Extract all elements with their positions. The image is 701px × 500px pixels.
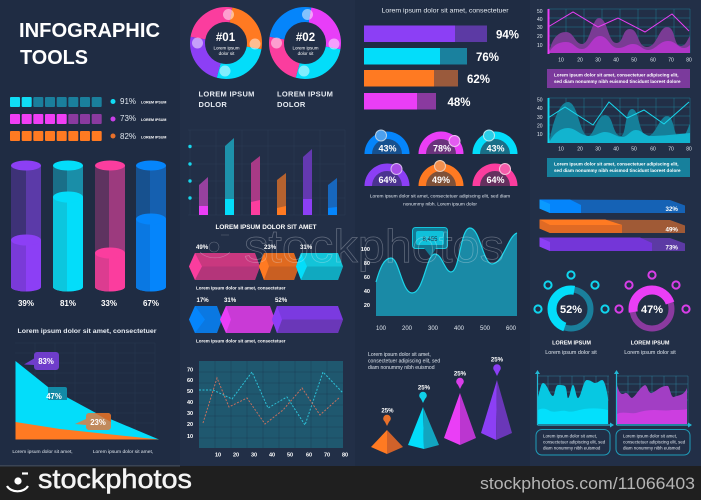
note box right: consectetuer adipiscing elit, sed [623, 440, 686, 444]
area chart with callouts: Lorem ipsum dolor sit amet, [12, 449, 73, 455]
ring #01: #01 [216, 32, 236, 44]
square progress rows [10, 97, 166, 141]
square progress rows: LOREM IPSUM [141, 118, 166, 122]
column chart [188, 130, 345, 215]
wave area chart: 20 [364, 303, 370, 309]
cyan note box [547, 158, 690, 177]
dashed line chart: 80 [342, 452, 348, 458]
cyan note box: sed diam nonummy nibh euismod tincidunt laoreet dolore [554, 168, 681, 173]
gauges: 64% [486, 175, 505, 185]
magenta line and area chart: 30 [595, 58, 601, 64]
cylinder 67%: 67% [143, 299, 159, 308]
value callout: 8,455 [422, 237, 438, 243]
ring #01: Lorem ipsum [213, 46, 240, 50]
title: INFOGRAPHIC [19, 20, 160, 42]
cyan line and area chart [537, 98, 692, 177]
ring #02: dolor sit [298, 51, 314, 56]
wave area chart: 100 [376, 326, 387, 332]
ring labels [198, 90, 333, 109]
ring #01 [192, 9, 260, 76]
area chart with callouts: Lorem ipsum dolor sit amet, [93, 449, 153, 455]
hexagon bar row 1: 23% [264, 244, 277, 251]
gauges [364, 130, 518, 186]
dashed line chart: 50 [187, 389, 193, 395]
horizontal bar chart: 76% [476, 52, 499, 64]
magenta line and area chart [537, 9, 692, 88]
dashed line chart: 50 [287, 452, 293, 458]
donut 47% [615, 271, 690, 356]
square progress rows: 73% [120, 114, 136, 123]
cyan line and area chart: 50 [537, 98, 543, 104]
wave area chart: 200 [402, 326, 413, 332]
pyramid chart: 25% [454, 370, 467, 378]
gauges: 64% [378, 175, 397, 185]
callout 23% [75, 413, 111, 430]
pyramid chart: Lorem ipsum dolor sit amet, [368, 352, 431, 358]
bottom watermark bar: stockphotos [38, 464, 192, 494]
pyramid chart: 25% [491, 356, 504, 364]
area chart with callouts [12, 328, 159, 455]
magenta line and area chart: 40 [537, 17, 543, 23]
ring #02 [271, 9, 340, 76]
small cyan area chart [535, 370, 614, 428]
magenta note box: sed diam nonummy nibh euismod tincidunt laoreet dolore [554, 79, 681, 84]
magenta note box [547, 69, 690, 88]
dashed line chart: 30 [251, 452, 257, 458]
magenta line and area chart: 10 [537, 43, 543, 49]
horizontal bar chart [364, 8, 519, 110]
watermark overlay: stockphotos [244, 220, 504, 272]
callout 83%: 83% [38, 357, 54, 366]
magenta line and area chart: 50 [631, 58, 637, 64]
wave area chart: 60 [364, 275, 370, 281]
callout 47% [46, 387, 67, 401]
square progress rows: LOREM IPSUM [141, 100, 166, 104]
gauges: 43% [486, 144, 505, 154]
hexagon bar row 2: Lorem ipsum dolor sit amet, consectetuer [196, 338, 286, 344]
gauge caption [370, 194, 510, 208]
hexagon bar row 2: 52% [275, 297, 288, 304]
gauges: 78% [433, 144, 451, 154]
cyan note box: Lorem ipsum dolor sit amet, consectetuer adipiscing elit, [554, 162, 679, 166]
dashed line chart [187, 361, 348, 458]
callout 47%: 47% [46, 392, 62, 401]
magenta line and area chart: 30 [537, 25, 543, 31]
area chart with callouts: Lorem ipsum dolor sit amet, consectetuer [18, 328, 157, 335]
horizontal bar chart: Lorem ipsum dolor sit amet, consectetuer [382, 8, 509, 14]
horizontal bar chart: 62% [467, 74, 490, 86]
value callout [412, 228, 448, 257]
wave area chart: 80 [364, 261, 370, 267]
cyan line and area chart: 80 [686, 146, 692, 152]
cyan line and area chart: 30 [537, 115, 543, 121]
donut 47%: 47% [641, 304, 663, 316]
cylinder 33%: 33% [101, 299, 117, 308]
wave area chart: 400 [454, 326, 465, 332]
dashed line chart: 70 [187, 368, 193, 374]
magenta line and area chart: 50 [537, 9, 543, 15]
donut 52%: LOREM IPSUM [552, 340, 591, 346]
note box right: Lorem ipsum dolor sit amet, [623, 434, 677, 438]
wave area chart: 40 [364, 289, 370, 295]
horizontal bar chart: 48% [448, 97, 471, 109]
dashed line chart: 70 [324, 452, 330, 458]
column chart heading: LOREM IPSUM DOLOR SIT AMET [216, 224, 317, 231]
dashed line chart: 10 [215, 452, 221, 458]
wave area chart: 300 [428, 326, 439, 332]
title: TOOLS [20, 47, 88, 69]
cyan line and area chart: 20 [577, 146, 583, 152]
wave area chart [361, 228, 517, 332]
hexagon bar row 1 [189, 244, 343, 290]
gauges: 43% [378, 144, 397, 154]
dashed line chart: 20 [233, 452, 239, 458]
pyramid chart [368, 352, 512, 454]
ring #01: dolor sit [219, 51, 235, 56]
hexagon bar row 2 [189, 297, 343, 344]
hexagon bar row 1: Lorem ipsum dolor sit amet, consectetuer [196, 286, 286, 290]
magenta line and area chart: 40 [613, 58, 619, 64]
cyan line and area chart: 10 [537, 132, 543, 138]
3D progress bars [540, 200, 685, 252]
hexagon bar row 2: 17% [196, 297, 209, 304]
note box right: diam nonummy nibh euismod [623, 446, 681, 450]
title [19, 20, 160, 69]
dashed line chart: 10 [187, 434, 193, 440]
ring #02: Lorem ipsum [292, 46, 319, 50]
dashed line chart: 40 [187, 400, 193, 406]
donut 52%: Lorem ipsum dolor sit [545, 350, 597, 356]
magenta line and area chart: 60 [650, 58, 656, 64]
cyan line and area chart: 50 [631, 146, 637, 152]
cylinder 39%: 39% [18, 299, 34, 308]
cyan line and area chart: 40 [537, 106, 543, 112]
cyan line and area chart: 60 [650, 146, 656, 152]
callout 83% [24, 352, 59, 370]
cylinder 81%: 81% [60, 299, 76, 308]
dashed line chart: 60 [187, 378, 193, 384]
cylinder 81% [53, 160, 83, 308]
cyan line and area chart: 10 [558, 146, 564, 152]
ring labels: LOREM IPSUM [277, 90, 333, 98]
ring labels: DOLOR [277, 100, 306, 109]
magenta line and area chart: 20 [577, 58, 583, 64]
dashed line chart: 40 [269, 452, 275, 458]
cylinder 67% [136, 160, 166, 308]
cylinder 33% [95, 160, 125, 308]
dashed line chart: 20 [187, 422, 193, 428]
note box left: consectetuer adipiscing elit, sed [543, 440, 606, 444]
dashed line chart: 30 [187, 411, 193, 417]
magenta note box: Lorem ipsum dolor sit amet, consectetuer adipiscing elit, [554, 72, 679, 78]
magenta line and area chart: 20 [537, 34, 543, 40]
ring labels: DOLOR [198, 100, 227, 109]
cyan line and area chart: 30 [595, 146, 601, 152]
gauges: 49% [432, 175, 450, 185]
gauge caption: Lorem ipsum dolor sit amet, consectetuer adipiscing elit, sed diam [370, 194, 510, 200]
3D progress bars: 32% [666, 206, 678, 213]
cyan line and area chart: 70 [668, 146, 674, 152]
donut 52% [534, 271, 609, 356]
cyan line and area chart: 40 [613, 146, 619, 152]
dual ring charts [192, 9, 340, 109]
horizontal bar chart: 94% [496, 30, 519, 42]
cylinder chart [11, 160, 166, 308]
3D progress bars: 73% [666, 244, 678, 252]
bottom watermark bar: stockphotos.com/11066403 [480, 474, 695, 493]
callout 23%: 23% [90, 418, 106, 427]
dashed line chart: 60 [306, 452, 312, 458]
gauge set [364, 130, 518, 208]
hexagon bar row 1: 31% [300, 244, 313, 251]
pyramid chart: consectetuer adipiscing elit, sed [368, 358, 440, 364]
square progress rows: 91% [120, 97, 136, 106]
donut 52%: 52% [560, 304, 582, 316]
wave area chart: 100 [361, 247, 370, 253]
note box right [616, 430, 690, 455]
cyan line and area chart: 20 [537, 124, 543, 130]
donut 47%: LOREM IPSUM [631, 340, 670, 346]
magenta line and area chart: 70 [668, 58, 674, 64]
hexagon bar row 2: 31% [224, 297, 237, 304]
magenta line and area chart: 80 [686, 58, 692, 64]
note box left: diam nonummy nibh euismod [543, 446, 601, 450]
wave area chart: 600 [506, 326, 517, 332]
bottom watermark bar [0, 464, 701, 500]
square progress rows: 82% [120, 132, 136, 141]
magenta line and area chart: 10 [558, 58, 564, 64]
3D progress bars: 49% [666, 226, 678, 234]
ring labels: LOREM IPSUM [198, 90, 255, 98]
ring #02: #02 [296, 32, 315, 44]
pyramid chart: 25% [418, 384, 431, 392]
note box left: Lorem ipsum dolor sit amet, [543, 434, 597, 438]
icon: smiling logo [7, 474, 28, 491]
hexagon bar row 1: 49% [196, 244, 209, 251]
pyramid chart: 25% [381, 408, 394, 414]
donut 47%: Lorem ipsum dolor sit [624, 350, 676, 356]
wave area chart: 500 [480, 326, 491, 332]
small purple area chart [614, 370, 692, 428]
note box left [536, 430, 610, 455]
cylinder 39% [11, 160, 41, 308]
gauge caption: nonummy nibh. Lorem ipsum dolor [403, 202, 477, 208]
square progress rows: LOREM IPSUM [141, 136, 166, 140]
pyramid chart: diam nonummy nibh euismod [368, 365, 435, 371]
